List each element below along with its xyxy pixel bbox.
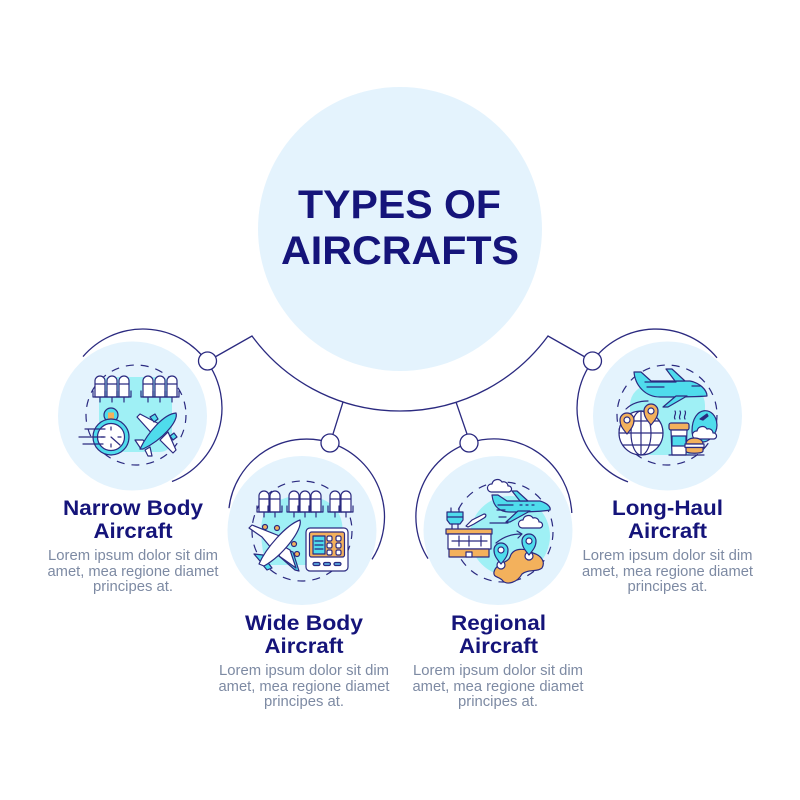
outline arc bbox=[229, 439, 384, 559]
label: long-haul aircraft: Lorem ipsum dolor sit dim bbox=[582, 548, 752, 564]
title: AIRCRAFTS bbox=[281, 229, 519, 273]
connector lines bbox=[215, 336, 585, 434]
label: narrow body aircraft bbox=[48, 497, 218, 595]
outline arc bbox=[83, 329, 222, 482]
label: regional aircraft: Regional bbox=[451, 612, 546, 635]
icon: seats, stopwatch and plane bbox=[79, 365, 186, 465]
connector node bbox=[460, 434, 478, 452]
icon: seats, plane and control panel bbox=[249, 481, 353, 581]
connector node bbox=[321, 434, 339, 452]
panel: long-haul aircraft bbox=[577, 329, 742, 490]
label: regional aircraft: Aircraft bbox=[459, 635, 538, 658]
label: narrow body aircraft: Lorem ipsum dolor sit dim bbox=[48, 548, 218, 564]
label: regional aircraft: amet, mea regione diamet bbox=[412, 679, 584, 695]
label: long-haul aircraft: amet, mea regione diamet bbox=[582, 564, 753, 580]
panel: regional aircraft bbox=[416, 434, 572, 605]
connector node bbox=[198, 352, 216, 370]
label: long-haul aircraft: principes at. bbox=[628, 579, 708, 595]
label: long-haul aircraft: Long-Haul bbox=[612, 497, 723, 520]
title bbox=[281, 183, 519, 273]
connector node bbox=[584, 352, 602, 370]
central circle bbox=[258, 87, 542, 371]
label: wide body aircraft: Lorem ipsum dolor sit dim bbox=[219, 663, 389, 679]
label: regional aircraft bbox=[412, 612, 584, 710]
label: narrow body aircraft: Aircraft bbox=[94, 520, 172, 543]
label: regional aircraft: Lorem ipsum dolor sit dim bbox=[413, 663, 583, 679]
label: wide body aircraft: Aircraft bbox=[264, 635, 344, 658]
label: regional aircraft: principes at. bbox=[458, 694, 538, 710]
label: long-haul aircraft: Aircraft bbox=[628, 520, 707, 543]
label: narrow body aircraft: amet, mea regione diamet bbox=[48, 564, 218, 580]
panel: wide body aircraft bbox=[228, 434, 384, 605]
label: narrow body aircraft: Narrow Body bbox=[63, 497, 203, 520]
icon: plane, globe, coffee and window bbox=[617, 365, 717, 465]
title: TYPES OF bbox=[298, 183, 501, 227]
outline arc bbox=[416, 439, 572, 559]
panel: narrow body aircraft bbox=[58, 329, 222, 490]
label: long-haul aircraft bbox=[582, 497, 753, 595]
label: wide body aircraft bbox=[218, 612, 390, 710]
label: narrow body aircraft: principes at. bbox=[93, 579, 173, 595]
outline arc bbox=[577, 329, 717, 482]
label: wide body aircraft: amet, mea regione diamet bbox=[218, 679, 390, 695]
label: wide body aircraft: principes at. bbox=[264, 694, 344, 710]
label: wide body aircraft: Wide Body bbox=[245, 612, 363, 635]
icon: airport, plane and map bbox=[446, 480, 553, 583]
